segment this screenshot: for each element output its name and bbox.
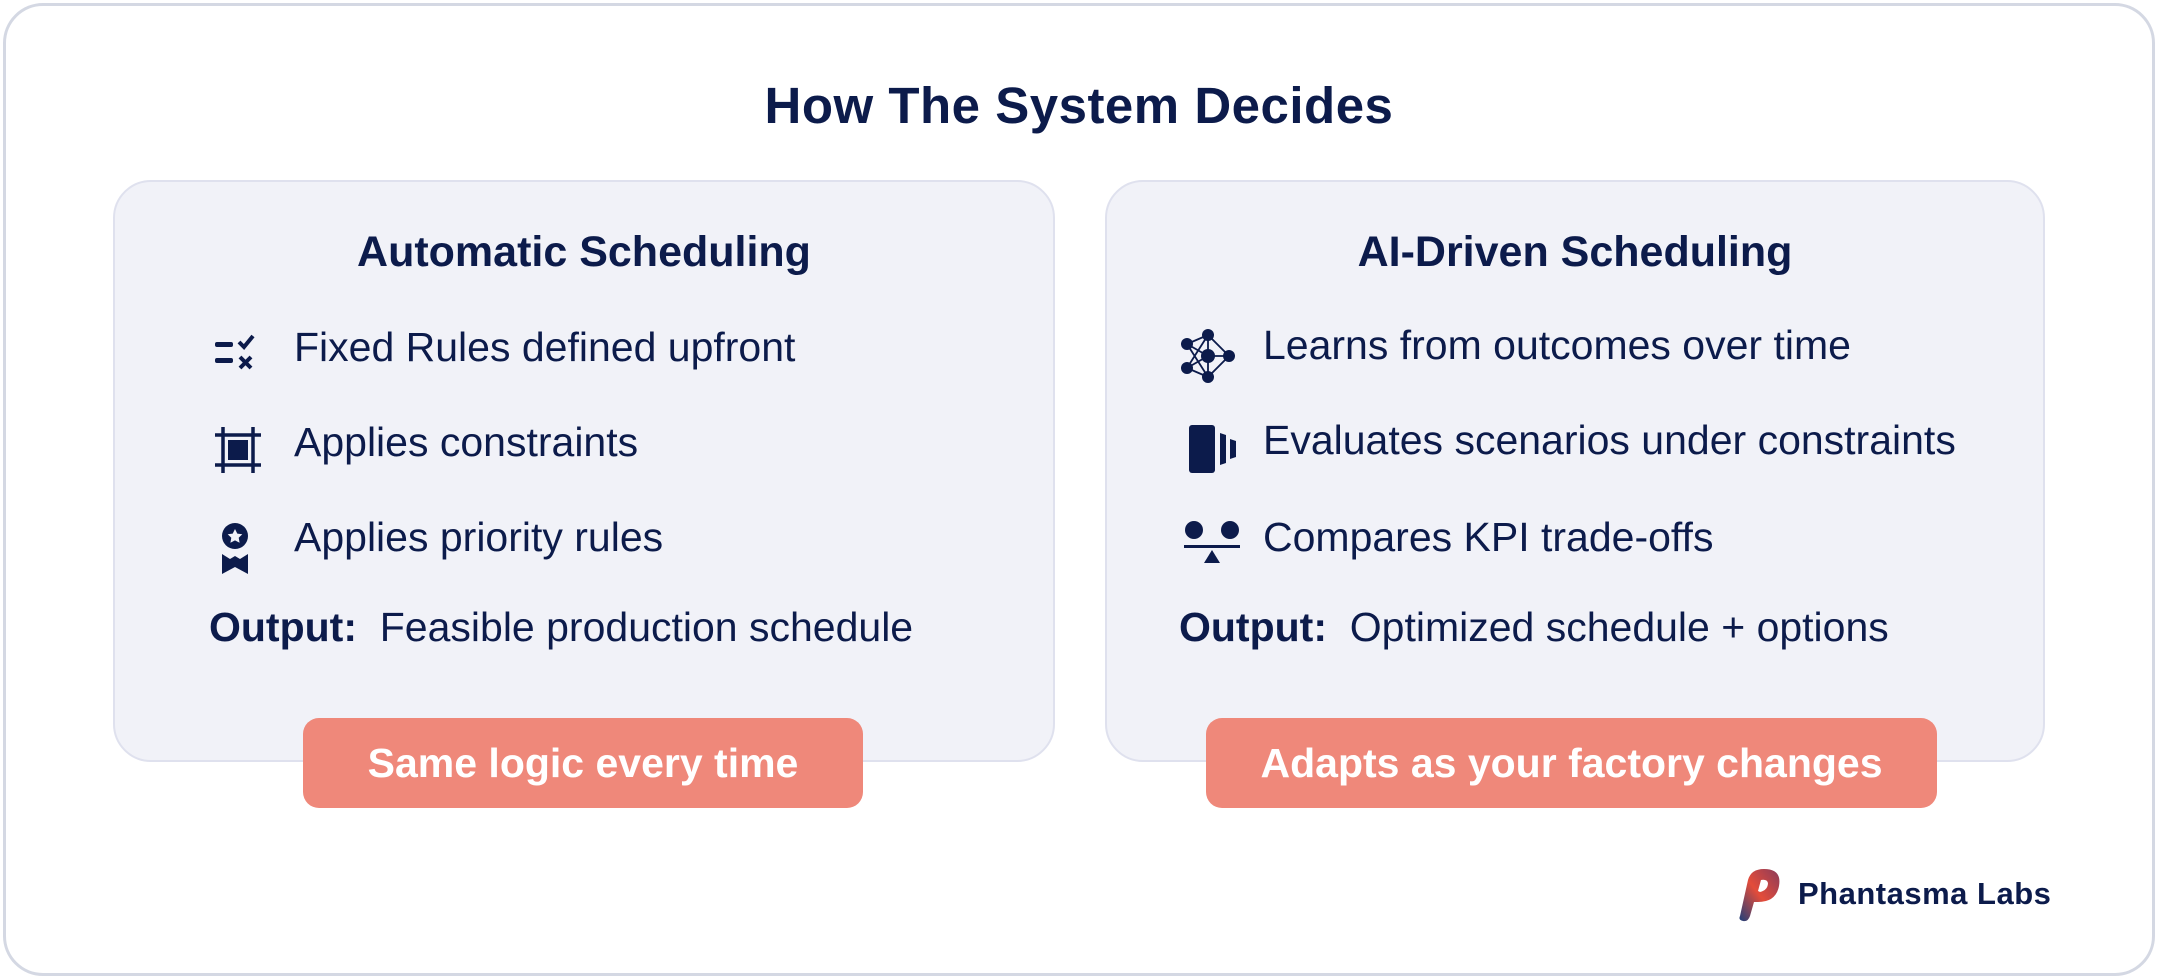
icon: crop frame: [215, 427, 261, 473]
logo: phantasma labs: [1739, 869, 2051, 922]
item: fixed rules: Fixed Rules defined upfront: [294, 324, 795, 370]
badge: adapts: Adapts as your factory changes: [1260, 740, 1883, 786]
badge: same logic: Same logic every time: [368, 740, 798, 786]
icon: scenario cards: [1189, 425, 1236, 473]
item: compares: Compares KPI trade-offs: [1263, 514, 1713, 560]
icon: checklist: [215, 334, 254, 370]
output: ai: Output: Optimized schedule + options: [1179, 604, 1889, 650]
item: constraints: [215, 419, 638, 473]
badge: same logic: [303, 718, 863, 808]
heading: automatic scheduling: Automatic Scheduling: [357, 228, 811, 276]
item: constraints: Applies constraints: [294, 419, 638, 465]
item: learns: [1181, 322, 1851, 383]
heading: ai-driven scheduling: AI-Driven Scheduling: [1358, 228, 1792, 276]
item: priority rules: Applies priority rules: [294, 514, 663, 560]
title: How The System Decides: [765, 77, 1393, 134]
panel: automatic scheduling: [113, 180, 1055, 762]
badge: adapts: [1206, 718, 1937, 808]
item: priority rules: [222, 514, 663, 574]
icon: neural network: [1181, 329, 1235, 383]
output: automatic: Output: Feasible production schedule: [209, 604, 913, 650]
item: learns: Learns from outcomes over time: [1263, 322, 1851, 368]
icon: balance: [1184, 521, 1240, 563]
icon: award: [222, 523, 248, 574]
logo: phantasma labs: Phantasma Labs: [1798, 876, 2051, 911]
panel: ai-driven scheduling: [1105, 180, 2045, 762]
icon: logo mark: [1739, 869, 1780, 922]
item: evaluates: Evaluates scenarios under constraints: [1263, 417, 1956, 463]
